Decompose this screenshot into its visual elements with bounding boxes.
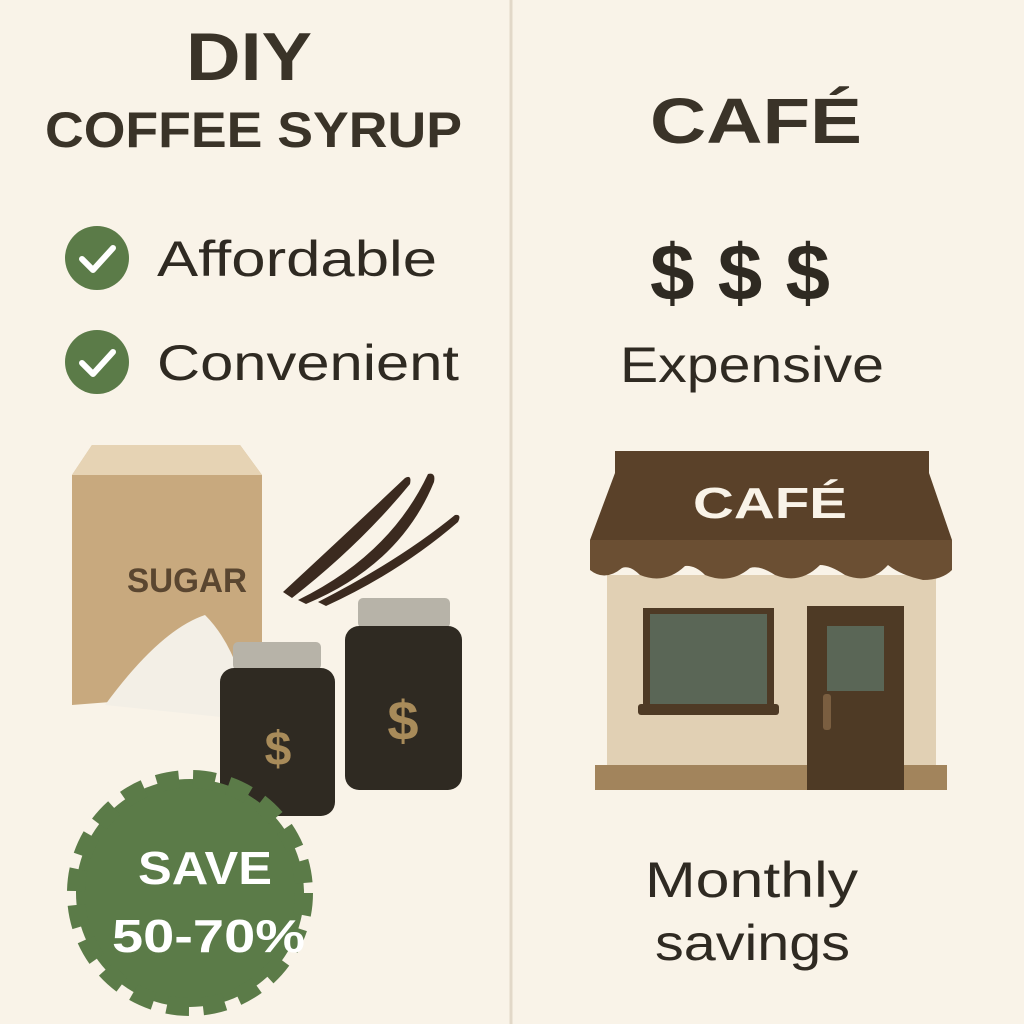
icon: sugar bag: SUGAR — [127, 562, 247, 600]
icon: sugar bag — [72, 445, 262, 720]
title: DIY coffee syrup: COFFEE SYRUP — [45, 102, 462, 158]
title: DIY coffee syrup: DIY — [186, 19, 312, 95]
list: DIY benefits — [65, 226, 459, 394]
title: DIY coffee syrup — [45, 19, 462, 158]
badge: save 50-70%: SAVE — [138, 842, 272, 894]
text: monthly savings: Monthly — [645, 852, 858, 908]
icon: small jar — [220, 642, 335, 816]
text: Convenient: Convenient — [157, 335, 459, 391]
icon: check affordable — [65, 226, 129, 290]
badge: save 50-70%: 50-70% — [112, 910, 305, 962]
icon: cafe storefront — [590, 451, 952, 790]
text: monthly savings — [645, 852, 858, 971]
icon: large jar — [345, 598, 462, 790]
icon: small jar: $ — [265, 723, 292, 776]
icon: large jar: $ — [387, 689, 419, 752]
text: monthly savings: savings — [655, 915, 850, 971]
text: $$$: $$$ — [650, 228, 830, 317]
icon: vanilla beans — [283, 474, 459, 606]
icon: cafe storefront: CAFÉ — [693, 478, 847, 528]
icon: check convenient — [65, 330, 129, 394]
title: CAFÉ: CAFÉ — [650, 85, 862, 157]
text: Affordable: Affordable — [157, 231, 437, 287]
badge: save 50-70% — [76, 779, 305, 1007]
text: Expensive: Expensive — [620, 337, 884, 393]
